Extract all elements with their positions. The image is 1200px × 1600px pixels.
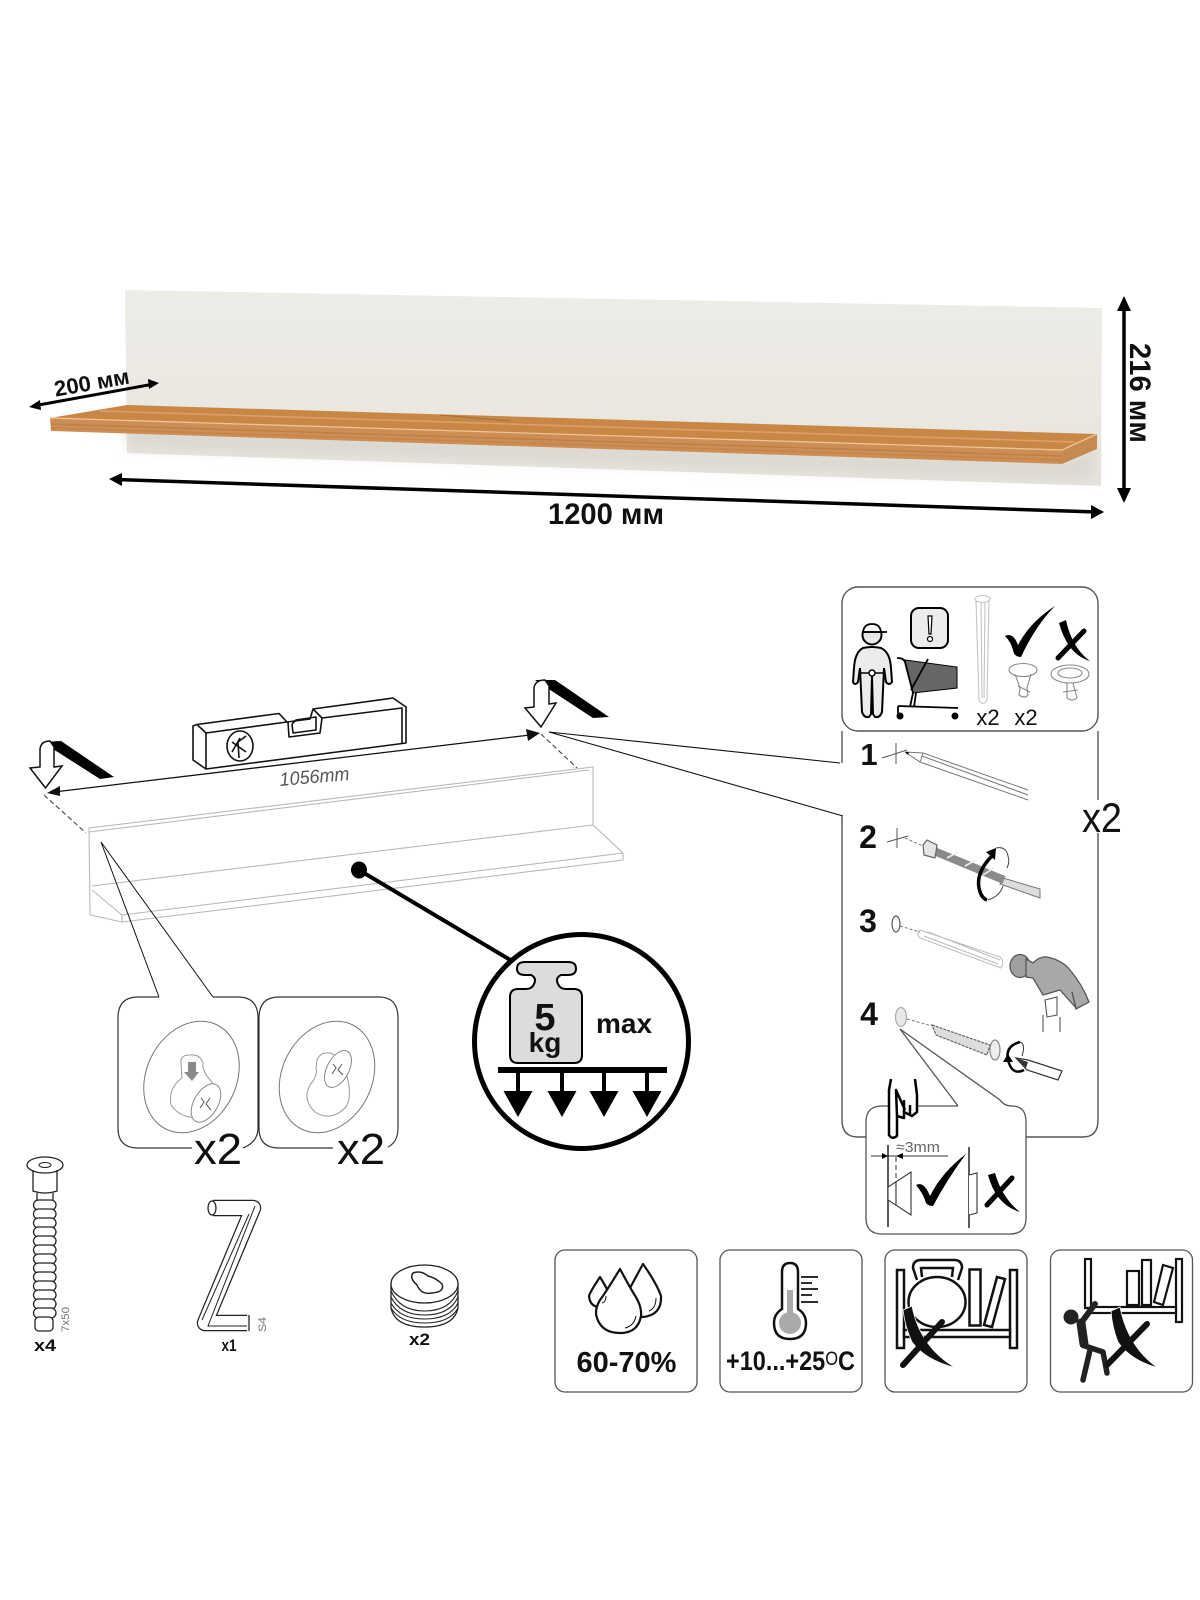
part: mounting plates x2: x2	[409, 1330, 430, 1349]
part: mounting plates x2	[391, 1265, 458, 1349]
panel: wall fixing steps	[842, 587, 1122, 1137]
part: hex key x1: S4	[257, 1317, 269, 1332]
load arrows	[498, 1067, 667, 1117]
icon panel: do not overload shelf	[885, 1250, 1027, 1392]
dimension: width 1200 mm: 1200 мм	[548, 498, 664, 531]
callout lines to keyhole details	[101, 842, 213, 997]
wood shelf	[50, 405, 1097, 464]
icon: correct screw	[1009, 664, 1037, 697]
mounting distance 1056mm	[44, 729, 577, 833]
step 2: drill hole	[859, 819, 1040, 900]
panel: screw clearance detail	[866, 1029, 1026, 1234]
panel: keyhole detail, screw locked	[259, 997, 398, 1174]
dimension: depth 200 mm	[29, 364, 159, 410]
drill bit	[923, 840, 1040, 898]
panel: wall fixing steps: x2	[1082, 794, 1122, 841]
badge: maximum load 5 kg	[474, 934, 688, 1148]
part: hex key x1: x1	[222, 1336, 236, 1355]
dimension: height 216 mm: 216 мм	[1123, 343, 1156, 443]
icon: left mounting marker arrow	[30, 741, 114, 788]
weight icon: 5	[534, 997, 556, 1039]
icon panel: do not climb on shelf	[1050, 1250, 1192, 1392]
icon: shopping cart	[896, 658, 958, 720]
icon panel: temperature +10...+25°C: O	[825, 1349, 838, 1370]
spirit level	[193, 698, 406, 769]
correct anchor	[888, 1145, 966, 1227]
icon panel: humidity 60-70%	[555, 1250, 697, 1392]
icon: wall plug	[975, 596, 990, 704]
panel: tools and fixings needed: x2	[1014, 705, 1038, 730]
dimension: height 216 mm	[1117, 296, 1156, 503]
back panel	[125, 290, 1102, 486]
rotation arrow	[979, 848, 1009, 900]
weight icon	[510, 962, 582, 1063]
panel: keyhole detail, screw inserted: x2	[194, 1125, 242, 1174]
icon panel: temperature +10...+25°C: +10...+25	[726, 1346, 840, 1376]
part: cam screw x4	[27, 1157, 72, 1355]
icon: correct tick	[1005, 606, 1055, 657]
callout leader: load point	[351, 862, 512, 961]
icon: right mounting marker arrow	[525, 680, 609, 727]
step 4: fix screw	[860, 996, 1062, 1080]
panel: tools and fixings needed	[842, 587, 1098, 731]
product photo: wall shelf	[50, 290, 1102, 486]
panel: keyhole detail, screw locked: x2	[337, 1125, 385, 1174]
wrong anchor	[969, 1147, 1020, 1228]
shelf line drawing	[89, 767, 623, 922]
icon panel: temperature +10...+25°C: C	[838, 1346, 855, 1376]
clearance dimension: ≈3mm	[896, 1139, 940, 1156]
step 3: hammer in wall plug: 3	[859, 903, 877, 939]
panel: keyhole detail, screw inserted	[118, 997, 258, 1174]
icon: climbing person	[1064, 1304, 1107, 1380]
dimension: width 1200 mm	[109, 473, 1104, 531]
icon: installer	[853, 624, 892, 717]
badge: maximum load 5 kg: max	[596, 1008, 652, 1039]
icon: pointing hand	[889, 1079, 917, 1138]
part: hex key x1	[202, 1201, 269, 1355]
pointer lines to wall-fixing panel	[549, 732, 843, 816]
weight icon: kg	[529, 1027, 561, 1058]
step 3: hammer in wall plug	[859, 903, 1089, 1032]
icon: warning	[911, 608, 948, 648]
icon: wrong cross	[1058, 620, 1090, 661]
icon: wrong screw	[1051, 665, 1089, 700]
icon panel: humidity 60-70%: 60-70%	[577, 1347, 677, 1379]
step 1: mark with pencil: 1	[860, 737, 878, 772]
mounting distance 1056mm: 1056mm	[279, 764, 350, 791]
step 2: drill hole: 2	[859, 819, 877, 855]
icon panel: temperature +10...+25°C	[720, 1250, 862, 1392]
part: cam screw x4: x4	[34, 1336, 57, 1355]
step 4: fix screw: 4	[860, 996, 878, 1032]
dimension: depth 200 mm: 200 мм	[52, 364, 131, 402]
panel: tools and fixings needed: x2	[976, 705, 1000, 730]
clearance dimension	[871, 1139, 948, 1159]
part: cam screw x4: 7x50	[60, 1307, 72, 1332]
step 1: mark with pencil	[860, 737, 1028, 800]
